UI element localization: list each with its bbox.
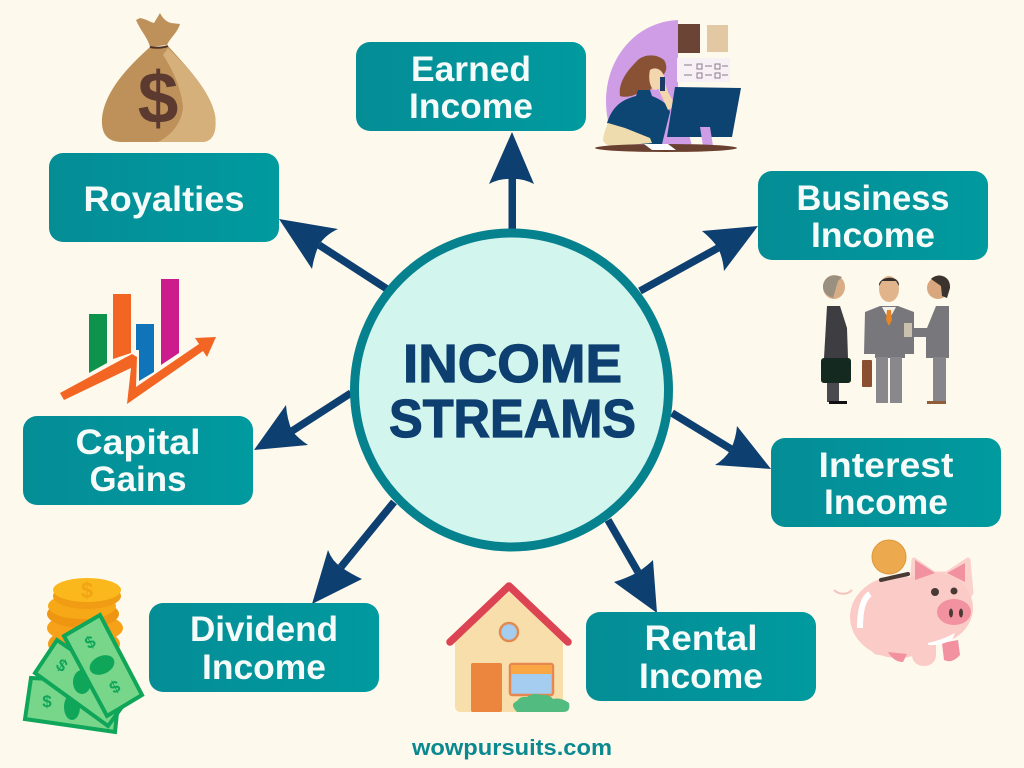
box: interest income — [771, 438, 1001, 527]
icon: money bag — [102, 13, 216, 142]
footer website: wowpursuits.com — [411, 735, 612, 760]
middle bill — [35, 640, 133, 726]
arrow: to capital gains — [254, 393, 351, 450]
box: dividend income: Dividend — [190, 610, 338, 649]
front bill: $ — [106, 676, 123, 697]
hair — [620, 55, 666, 97]
central circle — [354, 233, 668, 547]
box: interest income: Income — [824, 483, 948, 522]
face — [649, 68, 664, 90]
icon: piggy bank — [834, 540, 973, 666]
box: royalties — [49, 153, 279, 242]
box: capital gains — [23, 416, 253, 505]
box: business income: Income — [811, 216, 935, 255]
arrow: to earned income — [489, 132, 534, 230]
box: business income: Business — [796, 179, 950, 218]
box: interest income: Interest — [818, 446, 954, 485]
box: dividend income — [149, 603, 379, 692]
icon: bar chart with arrow — [60, 279, 216, 404]
icon: house — [450, 586, 569, 712]
torso — [607, 90, 670, 144]
box: earned income: Income — [409, 87, 533, 126]
box: business income — [758, 171, 988, 260]
right man — [927, 277, 949, 299]
dollar sign: $ — [138, 58, 178, 139]
box: capital gains: Gains — [90, 460, 186, 499]
title: INCOME — [403, 334, 622, 394]
arrow: to interest income — [672, 413, 771, 469]
icon: woman at computer — [595, 20, 741, 152]
back bill — [25, 678, 117, 732]
front bill — [64, 615, 142, 716]
coin — [872, 540, 906, 574]
title: STREAMS — [389, 389, 636, 449]
title — [389, 334, 636, 449]
front bill: $ — [82, 632, 99, 653]
box: rental income: Rental — [644, 619, 758, 658]
coin stack — [48, 628, 120, 660]
icon: coins and cash — [25, 578, 142, 732]
monitor — [667, 87, 741, 137]
box: dividend income: Income — [202, 648, 326, 687]
rising arrow — [60, 337, 216, 404]
box: rental income — [586, 612, 816, 701]
middle man — [879, 276, 899, 302]
box: rental income: Income — [639, 657, 763, 696]
back bill: $ — [42, 692, 52, 711]
arm — [603, 123, 652, 146]
box: earned income — [356, 42, 586, 131]
box: capital gains: Capital — [76, 423, 200, 462]
arrow: to dividend income — [312, 502, 394, 604]
icon: business people — [821, 275, 950, 404]
wall charts — [678, 24, 700, 53]
box: earned income: Earned — [411, 50, 531, 89]
bars — [89, 314, 107, 373]
arrow: to business income — [640, 226, 758, 291]
icon: coins and cash: $ — [81, 578, 93, 603]
desk — [595, 144, 737, 152]
arrow: to royalties — [279, 219, 387, 289]
arrow: to rental income — [608, 520, 657, 613]
middle bill: $ — [52, 655, 71, 676]
left man — [823, 275, 845, 299]
box: royalties: Royalties — [84, 180, 244, 219]
